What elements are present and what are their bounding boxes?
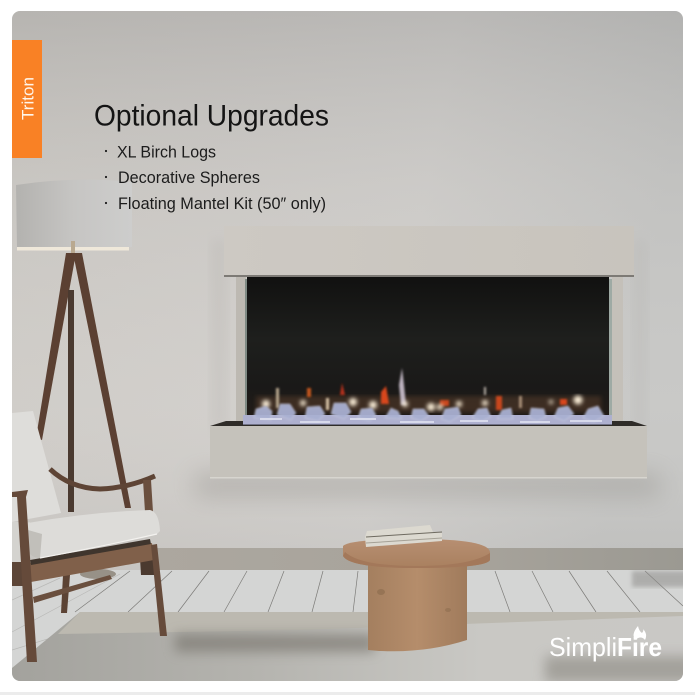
decorative glass rocks bbox=[243, 403, 612, 426]
tab: product name bbox=[12, 40, 42, 158]
wall bbox=[12, 11, 683, 571]
mantel top bbox=[294, 226, 610, 275]
lamp shade bbox=[16, 180, 132, 249]
side table bbox=[343, 525, 490, 651]
chair back cushion bbox=[12, 411, 61, 522]
brand logo: Simpli bbox=[549, 632, 617, 662]
wall shadow around fireplace bbox=[195, 240, 660, 496]
upgrades list bbox=[105, 143, 326, 213]
lamp legs bbox=[36, 253, 76, 440]
left seat fill bbox=[12, 522, 30, 562]
table base bbox=[368, 565, 467, 651]
bottom shelf bbox=[210, 421, 647, 478]
armchair bbox=[12, 411, 167, 662]
floor lamp bbox=[16, 180, 132, 512]
chair armrest bbox=[50, 469, 155, 489]
floor planks bbox=[12, 570, 683, 681]
seat frame bbox=[30, 543, 154, 582]
rug bbox=[12, 612, 683, 681]
rear legs bbox=[143, 480, 153, 512]
stacked books bbox=[365, 525, 442, 547]
front legs bbox=[12, 490, 37, 662]
floor shadow at right bbox=[632, 571, 692, 587]
seat underside bbox=[30, 539, 151, 565]
brand logo: Fire bbox=[617, 632, 662, 662]
flames bbox=[256, 368, 601, 412]
baseboard bbox=[150, 548, 683, 570]
brand logo bbox=[549, 626, 662, 662]
item: Decorative Spheres: Decorative Spheres bbox=[118, 169, 260, 187]
table top bbox=[343, 539, 490, 568]
fireplace side panels bbox=[236, 277, 623, 423]
logo flame bbox=[634, 626, 646, 640]
seat cushion bbox=[28, 510, 160, 558]
tab label: Triton bbox=[18, 77, 38, 120]
item: XL Birch Logs: XL Birch Logs bbox=[117, 143, 216, 161]
firebox glass bbox=[247, 277, 609, 415]
item: Floating Mantel Kit: Floating Mantel Kit (50″ only) bbox=[118, 195, 326, 213]
heading: Optional Upgrades bbox=[94, 100, 329, 132]
lamp base shadow bbox=[80, 569, 116, 579]
